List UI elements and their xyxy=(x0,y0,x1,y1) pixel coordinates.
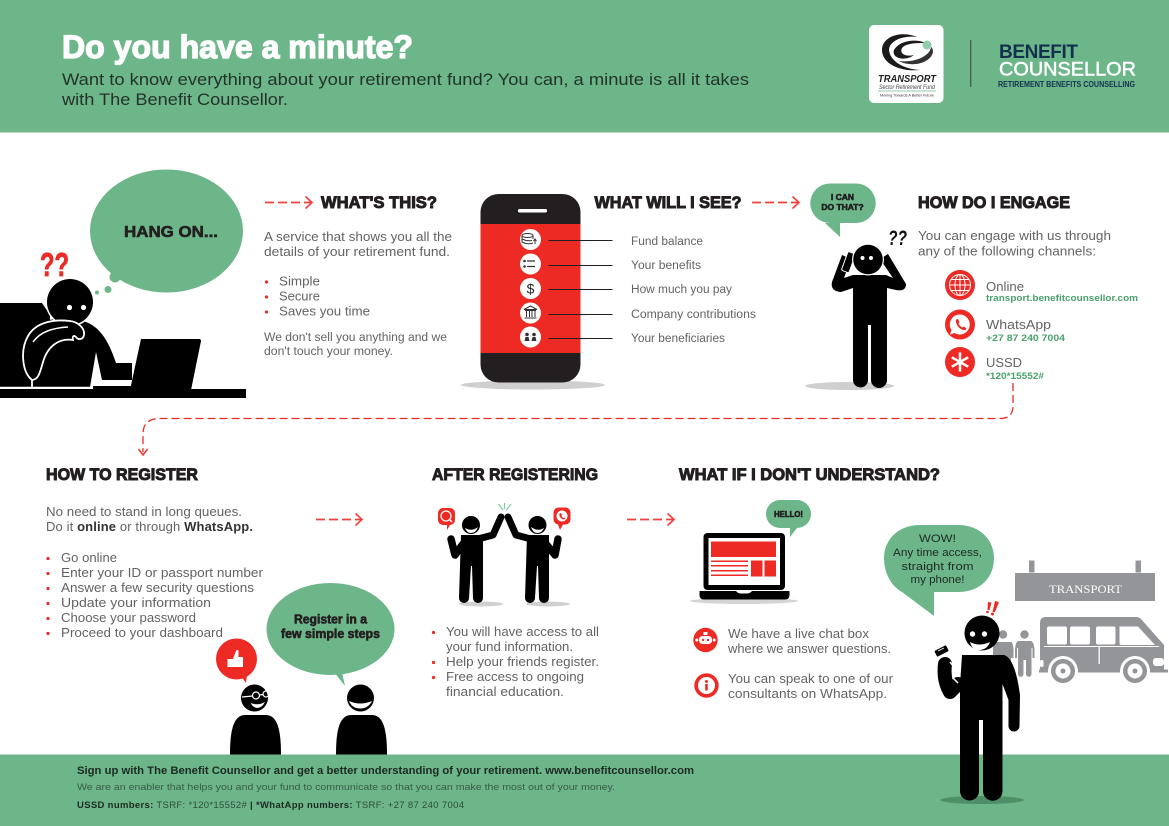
illustration: minibus xyxy=(1039,617,1168,686)
channel: whatsapp: WhatsApp xyxy=(986,317,1051,332)
panel: how do I engage xyxy=(918,193,1138,382)
illustration: phone with app menu xyxy=(461,194,612,390)
thought bubble: hang on: HANG ON... xyxy=(124,224,218,241)
menu icon: bank xyxy=(520,302,541,324)
steps list: Enter your ID or passport number xyxy=(61,565,264,580)
connector: dashed arrow to how to register xyxy=(138,383,1013,455)
live chat text: We have a live chat box xyxy=(728,626,869,641)
bullet list xyxy=(265,274,370,318)
panel: what if I don't understand xyxy=(679,465,940,701)
note: We don't sell you anything and we xyxy=(264,332,447,344)
steps list: Go online xyxy=(61,550,117,565)
logo: Transport Sector Retirement Fund: Moving Towards A Better Future xyxy=(880,92,935,98)
heading: HOW TO REGISTER xyxy=(46,465,198,484)
bullet list: Saves you time xyxy=(279,304,370,318)
heading: HOW DO I ENGAGE xyxy=(918,193,1070,212)
note xyxy=(264,332,447,358)
bullet list: your fund information. xyxy=(446,639,573,654)
icon: chat bot xyxy=(693,628,718,652)
channel: whatsapp: +27 87 240 7004 xyxy=(986,333,1066,344)
icon: thumbs up bubble xyxy=(216,638,257,683)
logo: Benefit Counsellor xyxy=(998,42,1136,89)
heading: WHAT WILL I SEE? xyxy=(594,193,742,212)
menu labels: Your beneficiaries xyxy=(631,333,725,345)
intro: any of the following channels: xyxy=(918,244,1096,258)
menu icon: dollar: $ xyxy=(527,280,535,296)
footer band: Sign up with The Benefit Counsellor and get a better understanding of your retirement. www.benefitcounsellor.com xyxy=(77,765,694,777)
note: don't touch your money. xyxy=(264,346,393,358)
consultants text: consultants on WhatsApp. xyxy=(728,686,887,701)
menu icon: benefits xyxy=(520,254,541,274)
channel: online: transport.benefitcounsellor.com xyxy=(986,293,1138,304)
illustration: bus queue people xyxy=(993,630,1034,677)
logo: Transport Sector Retirement Fund: TRANSPORT xyxy=(878,74,937,85)
steps list: Proceed to your dashboard xyxy=(61,625,223,640)
illustration: person on phone xyxy=(805,227,907,390)
illustration: thinking person at laptop xyxy=(0,246,246,398)
footer band: We are an enabler that helps you and your fund to communicate so that you can make the most out of your money. xyxy=(77,782,615,793)
speech bubble: register in a few simple steps: Register in a xyxy=(294,612,368,626)
intro: Do it online or through WhatsApp. xyxy=(46,519,253,534)
menu icon: dollar xyxy=(520,278,541,299)
logo: Transport Sector Retirement Fund: Sector Retirement Fund xyxy=(879,85,936,91)
arrow: to what if I don't understand xyxy=(627,514,674,526)
icon: search bubble xyxy=(438,508,455,530)
speech bubble: wow: my phone! xyxy=(910,574,964,586)
steps list: Update your information xyxy=(61,595,211,610)
person with glasses xyxy=(230,684,281,755)
footer band: USSD numbers: TSRF: *120*15552# | *WhatApp numbers: TSRF: +27 87 240 7004 xyxy=(77,800,464,811)
arrow: to how do I engage xyxy=(752,196,799,208)
bullet list: Simple xyxy=(279,274,320,288)
channel: whatsapp xyxy=(945,310,1066,344)
illustration: person with phone xyxy=(934,601,1024,804)
logo: Transport Sector Retirement Fund xyxy=(869,25,944,103)
menu labels xyxy=(631,236,756,345)
speech bubble: wow: Any time access, xyxy=(893,547,982,559)
intro: You can engage with us through xyxy=(918,228,1111,243)
speech bubble: hello: HELLO! xyxy=(774,510,803,519)
steps list: Choose your password xyxy=(61,610,196,625)
live chat text: where we answer questions. xyxy=(727,641,891,656)
heading: AFTER REGISTERING xyxy=(432,465,598,484)
speech bubble: I can do that xyxy=(810,184,876,237)
thought bubble: hang on xyxy=(90,170,243,294)
bullet list: Secure xyxy=(279,288,320,304)
title: Do you have a minute? xyxy=(62,29,413,65)
speech bubble: wow: straight from xyxy=(902,561,974,573)
description xyxy=(264,229,452,259)
steps list: Answer a few security questions xyxy=(61,580,255,595)
menu labels: How much you pay xyxy=(631,284,732,296)
logo: Benefit Counsellor: BENEFIT xyxy=(999,42,1078,63)
description: details of your retirement fund. xyxy=(264,244,450,259)
panel: what's this xyxy=(264,193,452,358)
menu labels: Company contributions xyxy=(631,309,756,321)
logo: Benefit Counsellor: RETIREMENT BENEFITS COUNSELLING xyxy=(998,80,1135,89)
channel: USSD: USSD xyxy=(986,355,1022,370)
panel: after registering xyxy=(432,465,599,699)
subtitle xyxy=(61,70,749,109)
bullet list: Free access to ongoing xyxy=(446,669,584,684)
illustration: high five xyxy=(438,503,570,606)
footer band xyxy=(0,754,1169,826)
channel: online: Online xyxy=(986,279,1024,294)
illustration: two people talking xyxy=(230,684,387,755)
steps list xyxy=(46,550,264,640)
illustration: laptop xyxy=(690,533,798,604)
smiling person xyxy=(336,684,387,755)
speech bubble: register in a few simple steps xyxy=(266,583,394,686)
bullet list: financial education. xyxy=(446,684,564,699)
menu labels: Your benefits xyxy=(631,260,701,272)
heading: WHAT'S THIS? xyxy=(321,193,437,212)
consultants text xyxy=(728,671,894,701)
menu icon: fund balance xyxy=(520,229,541,250)
subtitle: with The Benefit Counsellor. xyxy=(61,90,288,109)
panel: how to register xyxy=(46,465,264,640)
speech bubble: register in a few simple steps: few simple steps xyxy=(281,627,380,641)
live chat text xyxy=(727,626,891,656)
subtitle: Want to know everything about your retirement fund? You can, a minute is all it takes xyxy=(62,70,749,89)
channel: USSD xyxy=(945,347,1045,382)
intro xyxy=(46,504,253,534)
bullet list: Help your friends register. xyxy=(446,654,599,669)
heading: WHAT IF I DON'T UNDERSTAND? xyxy=(679,465,940,484)
arrow: to what's this xyxy=(265,196,312,208)
arrow: to after registering xyxy=(316,514,362,526)
speech bubble: I can do that: I CAN xyxy=(831,192,854,202)
consultants text: You can speak to one of our xyxy=(728,671,894,686)
panel: what will I see xyxy=(594,193,756,345)
description: A service that shows you all the xyxy=(264,229,452,244)
illustration: person on phone: ?? xyxy=(888,227,907,250)
header band xyxy=(0,0,1169,132)
menu icon: beneficiaries xyxy=(520,326,541,348)
intro: No need to stand in long queues. xyxy=(46,504,242,519)
menu labels: Fund balance xyxy=(631,236,703,248)
bullet list xyxy=(432,624,599,699)
speech bubble: hello xyxy=(766,500,811,537)
bullet list: You will have access to all xyxy=(446,624,599,639)
illustration: transport sign xyxy=(1015,560,1155,601)
speech bubble: I can do that: DO THAT? xyxy=(821,202,864,212)
illustration: transport sign: TRANSPORT xyxy=(1049,582,1123,596)
channel: online xyxy=(945,270,1138,304)
channel: USSD: *120*15552# xyxy=(986,371,1045,382)
speech bubble: wow: WOW! xyxy=(919,533,956,545)
intro xyxy=(918,228,1111,258)
icon: info xyxy=(694,673,719,698)
speech bubble: wow xyxy=(884,525,994,616)
logo: Benefit Counsellor: COUNSELLOR xyxy=(999,60,1136,80)
icon: whatsapp bubble xyxy=(554,508,570,530)
illustration: thinking person at laptop: ?? xyxy=(40,246,69,283)
